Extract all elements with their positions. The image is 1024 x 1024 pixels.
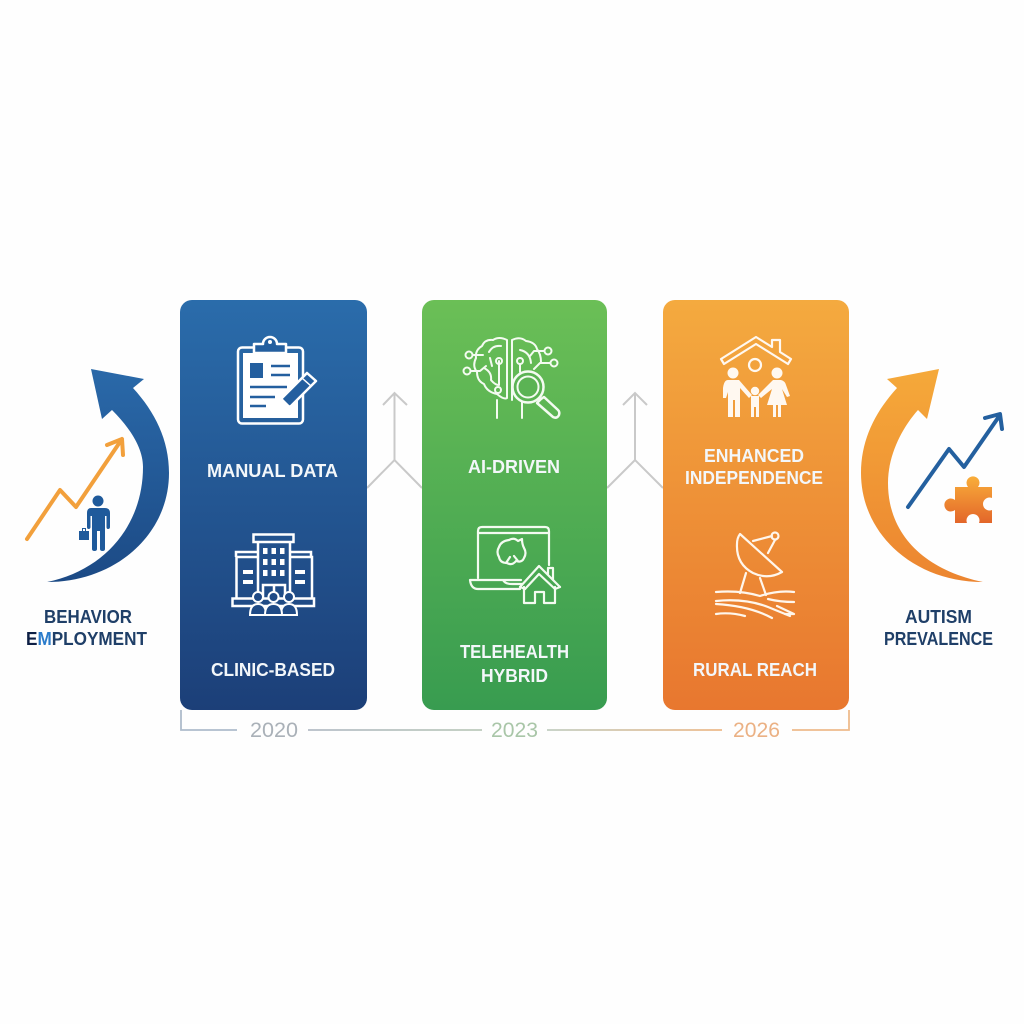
icon: family under roof: [721, 337, 791, 417]
icon: clipboard and pencil: [238, 337, 316, 424]
panel: 2026 orange: [663, 300, 849, 710]
icon: clinic building with people: [232, 534, 314, 615]
year: 2020: 2020: [250, 719, 298, 742]
side metric: autism prevalence: [861, 369, 1002, 649]
label: prevalence: PREVALENCE: [884, 629, 993, 649]
panel: 2020 blue: [180, 300, 367, 710]
year: 2023: 2023: [491, 719, 538, 742]
connector arrow: 2023 to 2026: [607, 393, 663, 488]
icon: brain with magnifier: [464, 338, 559, 418]
timeline segment: 2023 to 2026: [547, 729, 722, 731]
timeline segment: 2020 to 2023: [308, 729, 482, 731]
timeline bracket: start: [181, 710, 237, 730]
label: behavior: BEHAVIOR: [44, 607, 132, 627]
panel background: [180, 300, 367, 710]
label: clinic-based: CLINIC-BASED: [211, 660, 335, 680]
label: enhanced: ENHANCED: [704, 446, 804, 466]
label: hybrid: HYBRID: [481, 666, 548, 686]
timeline bracket: end: [792, 710, 849, 730]
label: employment line: EMPLOYMENT: [26, 629, 147, 649]
side metric: behavior employment: [26, 369, 169, 649]
label: rural reach: RURAL REACH: [693, 660, 817, 680]
panel: 2023 green: [422, 300, 607, 710]
icon: person with briefcase: [79, 496, 110, 551]
curved upward arrow: blue: [47, 369, 169, 582]
year: 2026: 2026: [733, 719, 780, 742]
curved upward arrow: orange: [861, 369, 983, 582]
label: manual data: MANUAL DATA: [207, 461, 338, 481]
label: telehealth: TELEHEALTH: [460, 642, 569, 662]
trend line: orange: [27, 439, 123, 539]
connector arrow: 2020 to 2023: [367, 393, 422, 488]
timeline: [181, 710, 849, 742]
icon: satellite dish over landscape: [716, 532, 794, 618]
panel background: [422, 300, 607, 710]
trend line: blue: [908, 414, 1002, 507]
label: independence: INDEPENDENCE: [685, 468, 823, 488]
icon: laptop and house: [470, 527, 560, 603]
icon: puzzle piece: [944, 476, 992, 523]
panel background: [663, 300, 849, 710]
label: ai-driven: AI-DRIVEN: [468, 457, 560, 477]
label: autism: AUTISM: [905, 607, 972, 627]
